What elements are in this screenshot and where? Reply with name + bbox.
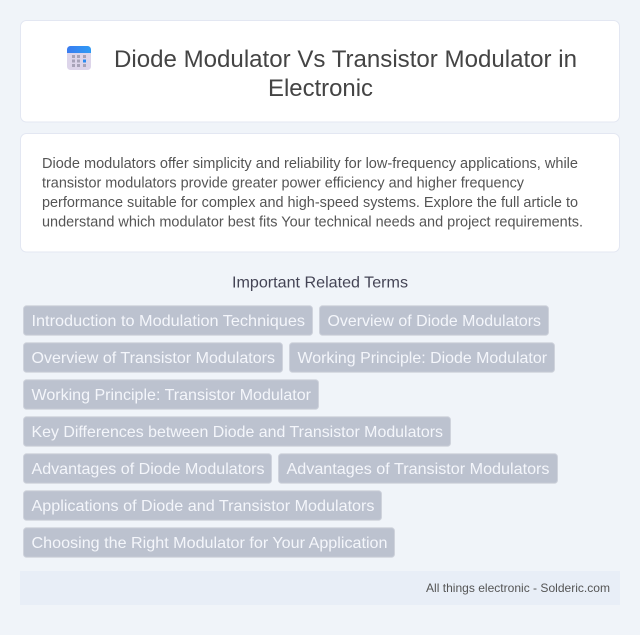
panel: related term tags xyxy=(24,306,558,557)
tag: advantages diode: Advantages of Diode Modulators xyxy=(32,461,264,478)
tag: introduction: Introduction to Modulation Techniques xyxy=(32,313,305,330)
tag: working principle diode: Working Principle: Diode Modulator xyxy=(298,350,548,367)
tag: key differences: Key Differences between Diode and Transistor Modulators xyxy=(32,424,443,441)
tag: overview diode xyxy=(320,306,548,335)
tag: introduction xyxy=(24,306,312,335)
text block: introduction paragraph: understand which modulator best fits Your technical needs and project requirements. xyxy=(42,214,583,230)
tag: choosing xyxy=(24,528,394,557)
tag: choosing: Choosing the Right Modulator for Your Application xyxy=(32,535,388,552)
tag: overview transistor: Overview of Transistor Modulators xyxy=(32,350,275,367)
title xyxy=(114,46,577,102)
tag: overview transistor xyxy=(24,343,282,372)
tag: advantages diode xyxy=(24,454,272,483)
tag: key differences xyxy=(24,417,450,446)
title: Electronic xyxy=(268,75,373,102)
tag: applications: Applications of Diode and Transistor Modulators xyxy=(32,498,374,515)
tag: advantages transistor: Advantages of Transistor Modulators xyxy=(286,461,550,478)
footer xyxy=(20,571,620,605)
text block: introduction paragraph xyxy=(42,156,583,230)
tag: working principle diode xyxy=(290,343,554,372)
heading: important related terms: Important Related Terms xyxy=(232,274,408,292)
icon: calendar xyxy=(67,46,91,70)
text block: introduction paragraph: Diode modulators offer simplicity and reliability for low-frequency applications, while xyxy=(42,156,578,172)
panel: introduction xyxy=(20,134,620,252)
tag: overview diode: Overview of Diode Modulators xyxy=(328,313,541,330)
text block: introduction paragraph: performance suitable for complex and high-speed systems. Explore the full article to xyxy=(42,195,578,211)
footer text: All things electronic - Solderic.com xyxy=(426,581,610,595)
tag: applications xyxy=(24,491,382,520)
title: Diode Modulator Vs Transistor Modulator in xyxy=(114,46,577,73)
tag: advantages transistor xyxy=(278,454,558,483)
text block: introduction paragraph: transistor modulators provide greater power efficiency and higher frequency xyxy=(42,176,525,192)
panel: header xyxy=(20,20,620,122)
tag: working principle transistor xyxy=(24,380,318,409)
tag: working principle transistor: Working Principle: Transistor Modulator xyxy=(32,387,312,404)
